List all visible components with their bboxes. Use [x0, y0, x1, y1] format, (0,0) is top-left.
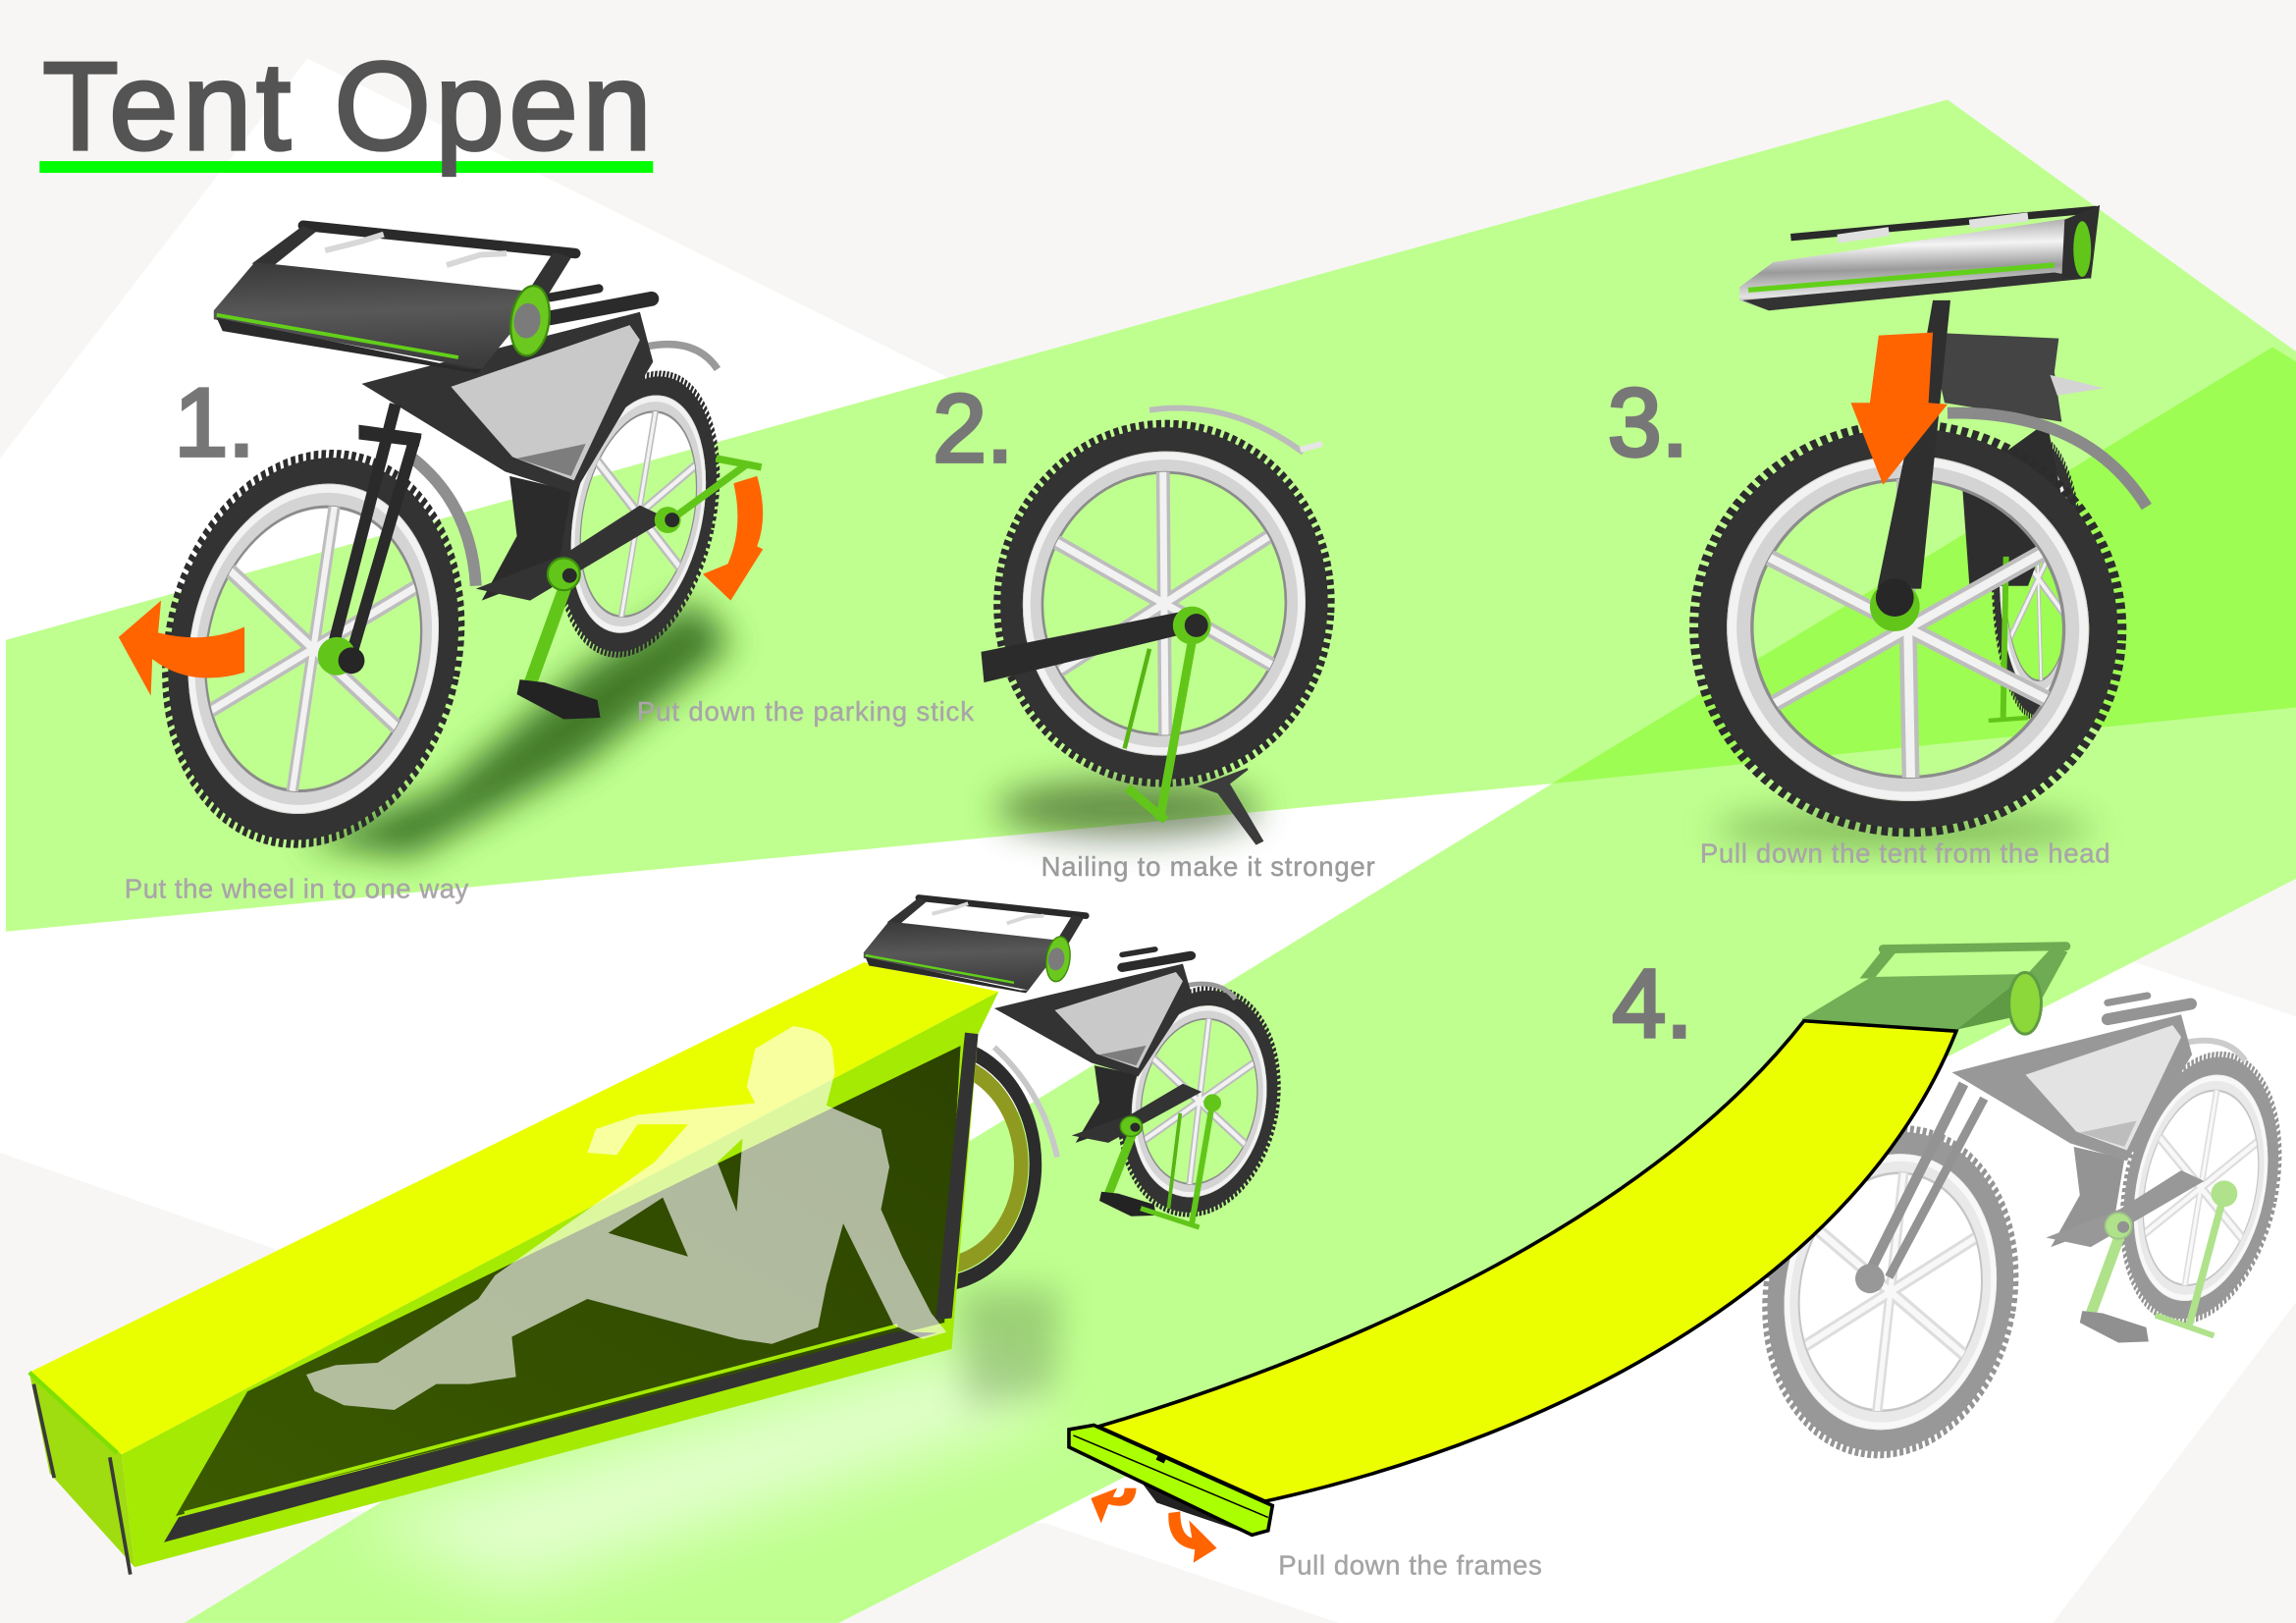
bike 1: step 1 illustration [131, 226, 762, 871]
tent: deployed with sitting figure [29, 962, 998, 1575]
arrow: frame left [1091, 1488, 1137, 1523]
shadow: bike 1 [300, 601, 732, 857]
label: pull down tent: Pull down the tent from the head [1700, 839, 2110, 869]
wheel: step 2 illustration [981, 408, 1343, 820]
background: light green upper band [6, 99, 2296, 932]
label: put the wheel: Put the wheel in to one way [125, 873, 469, 903]
arrow: parking stick down [703, 476, 763, 601]
background: light green lower band [185, 708, 2296, 1623]
shadow: step 3 [1713, 808, 2094, 849]
glow: pale fade under tent [351, 1355, 1069, 1590]
number 3: 3. [1608, 368, 1688, 476]
shadow: tent [959, 1289, 1061, 1406]
label: nailing: Nailing to make it stronger [1041, 851, 1375, 882]
number 1: 1. [175, 368, 255, 476]
number 4: 4. [1612, 949, 1692, 1057]
label: parking stick: Put down the parking stick [637, 696, 974, 727]
ghost tent head [1801, 947, 2067, 1034]
bike: with deployed tent [838, 949, 1296, 1284]
arrow: wheel turn [119, 601, 244, 696]
yellow tent strip [1098, 1021, 1956, 1501]
tent head on bottom bike [864, 897, 1086, 993]
tent end frame [1069, 1425, 1272, 1535]
background: brighter green triangle [1552, 348, 2296, 784]
title: Tent Open [42, 36, 652, 176]
shadow: step 2 [995, 780, 1259, 838]
ghost bike: step 4 illustration [1740, 996, 2296, 1474]
number 2: 2. [933, 374, 1013, 482]
arrow: pull down tent [1851, 333, 1948, 485]
label: pull down frames: Pull down the frames [1278, 1550, 1542, 1581]
figure silhouette [306, 1026, 946, 1410]
arrow: nailing [1201, 769, 1262, 843]
arrow: frame right [1168, 1511, 1217, 1563]
bike: step 3 illustration [1682, 205, 2147, 846]
